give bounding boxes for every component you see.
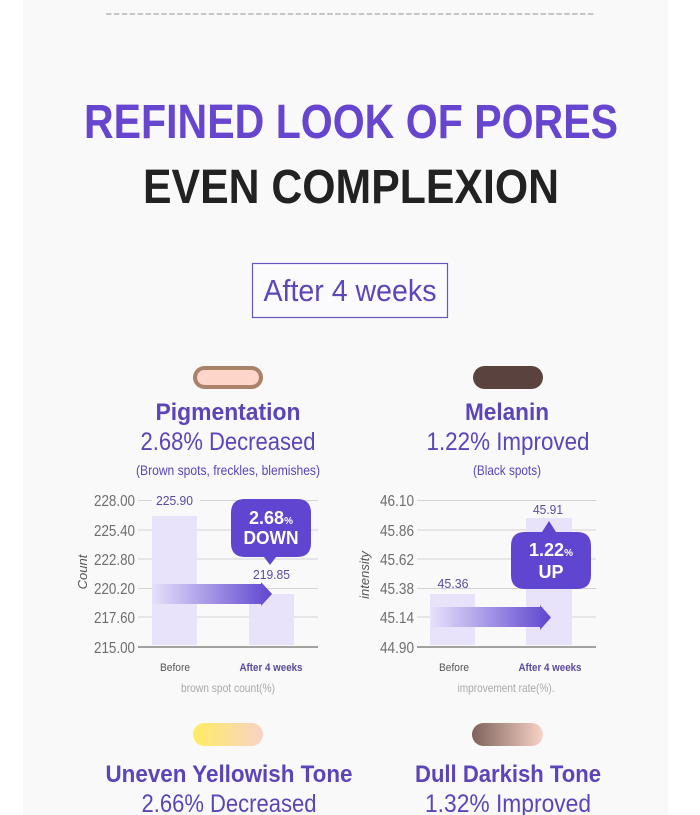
icon: dark swatch [472,723,543,746]
melanin heading: Melanin [465,399,549,426]
bars [430,594,475,645]
callout: 1.22% up: UP [538,562,564,582]
pigmentation heading: Pigmentation [156,399,300,426]
icon: pigmentation swatch [195,368,261,387]
y axis labels: 225.40 [94,523,135,540]
y axis labels: 220.20 [94,581,135,598]
y axis labels: 215.00 [94,640,135,657]
chart caption: brown spot count(%) [181,681,275,695]
arrow [431,605,551,630]
badge: after 4 weeks [252,264,448,318]
pigmentation note: (Brown spots, freckles, blemishes) [136,462,320,478]
bar chart: melanin [357,493,596,695]
y axis labels: 45.38 [380,581,414,598]
callout: 2.68% down [231,499,311,565]
title [84,96,618,214]
callout: 1.22% up: 1.22% [529,540,573,560]
yellowish heading: Uneven Yellowish Tone [106,761,352,788]
melanin result: 1.22% Improved [426,428,590,456]
y axis labels: 228.00 [94,493,135,510]
bar chart: melanin: 45.91 [533,502,563,517]
pigmentation result: 2.68% Decreased [140,428,316,456]
y axis title: Count [75,553,90,589]
panel: uneven yellowish tone [106,723,352,815]
y axis labels: 45.14 [380,610,414,627]
x axis labels: Before [160,662,190,674]
y axis labels: 217.60 [94,610,135,627]
darkish heading: Dull Darkish Tone [415,761,601,788]
y axis title: intensity [357,550,372,599]
badge: after 4 weeks: After 4 weeks [264,273,436,308]
y axis labels: 44.90 [380,640,414,657]
callout: 2.68% down: 2.68% [249,508,293,528]
y axis labels: 222.80 [94,552,135,569]
panel: pigmentation [136,368,320,478]
value labels: 225.90 [156,493,193,508]
bar chart: pigmentation [75,493,318,695]
y axis labels: 45.62 [380,552,414,569]
y axis labels [380,493,414,657]
chart caption: improvement rate(%). [458,681,554,695]
y axis labels: 45.86 [380,523,414,540]
title: EVEN COMPLEXION [143,161,559,214]
callout: 2.68% down: DOWN [244,528,298,548]
panel: melanin [426,366,590,478]
bars [152,516,197,645]
panel: dull darkish tone [415,723,601,815]
value labels: 45.36 [438,576,468,591]
icon: yellow swatch [193,723,263,746]
bar chart: pigmentation: 219.85 [253,567,290,582]
title: REFINED LOOK OF PORES [84,96,618,149]
icon: melanin swatch [473,366,543,389]
bar chart: pigmentation: After 4 weeks [240,662,302,674]
melanin note: (Black spots) [473,462,541,478]
y axis labels [94,493,135,657]
x axis labels: Before [439,662,469,674]
y axis labels: 46.10 [380,493,414,510]
callout: 1.22% up [511,521,591,589]
bar chart: melanin: After 4 weeks [518,662,582,674]
arrow [152,582,272,606]
